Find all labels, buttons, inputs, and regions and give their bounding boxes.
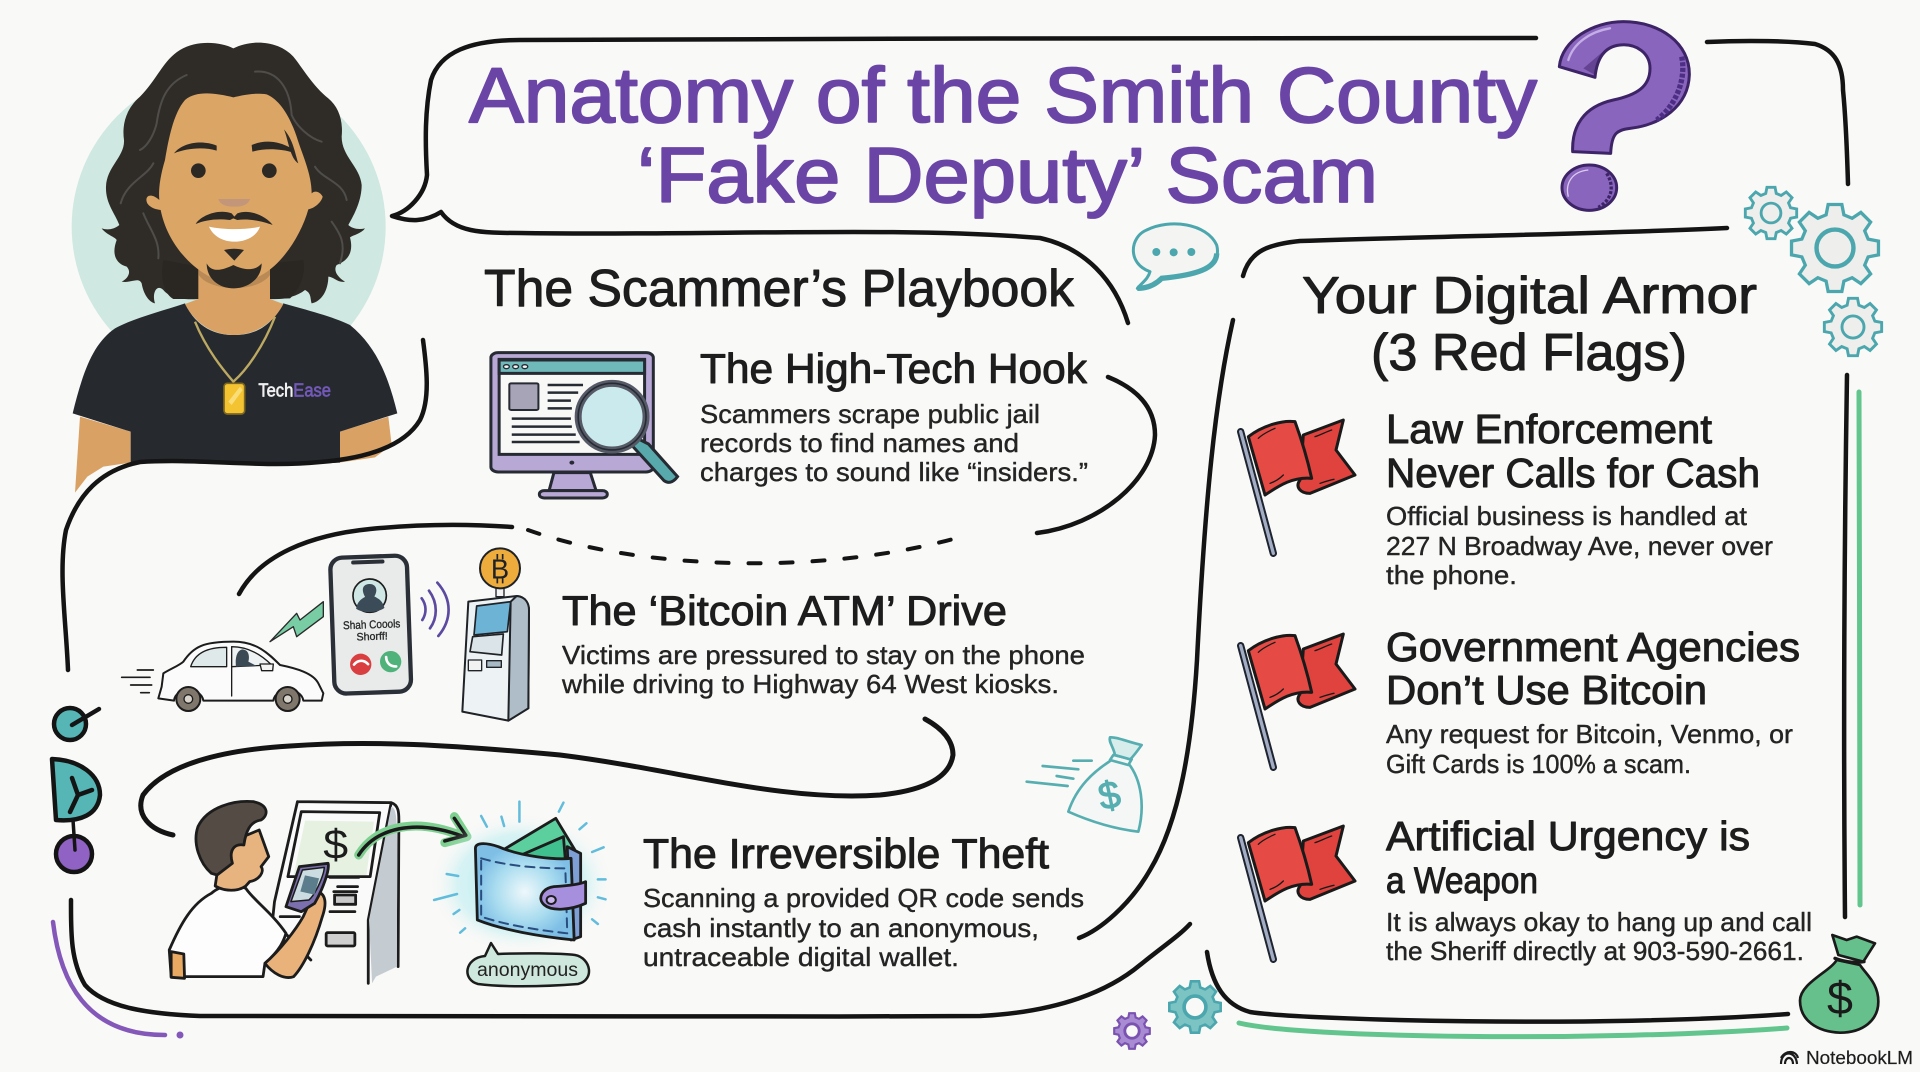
bitcoin ATM — [462, 548, 529, 721]
item 1 heading: Law Enforcement — [1386, 406, 1713, 452]
icon: green money bag — [1800, 935, 1878, 1033]
person — [169, 886, 286, 977]
facial features — [174, 142, 293, 288]
icon: flying money bag — [1027, 737, 1142, 832]
icon: gears bottom — [1114, 981, 1221, 1049]
panel outline: right — [1207, 375, 1847, 1022]
panel: irreversible theft — [169, 801, 1084, 986]
heading: The High-Tech Hook — [700, 345, 1088, 392]
item 3 heading — [1386, 813, 1750, 901]
text block: untraceable digital wallet. — [643, 942, 959, 972]
title — [469, 51, 1537, 219]
bitcoin ATM: B — [491, 553, 509, 584]
phone: Shorff! — [356, 630, 388, 643]
item 2 text: Gift Cards is 100% a scam. — [1386, 749, 1691, 779]
wallet — [475, 844, 574, 940]
item 1 text: the phone. — [1386, 560, 1517, 590]
icon: car, phone and ATM — [122, 548, 529, 721]
flag 2 — [1241, 634, 1355, 767]
item 3 text: It is always okay to hang up and call — [1386, 907, 1812, 937]
item 3 heading: Artificial Urgency is — [1386, 813, 1750, 859]
heading: The ‘Bitcoin ATM’ Drive — [562, 587, 1007, 634]
text block: Victims are pressured to stay on the phone — [562, 640, 1085, 670]
face — [146, 93, 323, 281]
arms — [75, 417, 392, 493]
avatar: TechEase presenter — [72, 43, 397, 493]
text block: Scanning a provided QR code sends — [643, 883, 1084, 913]
footer: NotebookLM logo: NotebookLM — [1806, 1048, 1913, 1068]
left panel outline — [63, 320, 1233, 1017]
icon: flying money bag: $ — [1095, 773, 1124, 819]
panel: bitcoin ATM drive — [122, 548, 1085, 721]
item 1 text — [1386, 501, 1773, 590]
illustration: person scanning QR at ATM: $ — [323, 820, 348, 868]
text block — [643, 883, 1084, 972]
item 2 text — [1386, 719, 1793, 779]
accent strokes — [53, 922, 183, 1038]
ATM — [273, 802, 399, 983]
sparkle lines — [434, 802, 606, 933]
shirt — [73, 303, 397, 464]
item 3 text — [1386, 907, 1812, 966]
phone — [330, 555, 411, 694]
icon: gear cluster — [1745, 187, 1882, 356]
icon: chat bubble — [1133, 224, 1217, 288]
panel: digital armor — [1241, 267, 1812, 966]
heading: The Irreversible Theft — [643, 830, 1049, 877]
item 1 heading: Never Calls for Cash — [1386, 450, 1760, 496]
green accent lines — [1239, 392, 1860, 1037]
heading: Your Digital Armor — [1302, 267, 1757, 325]
item 2 text: Any request for Bitcoin, Venmo, or — [1386, 719, 1793, 749]
title: ‘Fake Deputy’ Scam — [637, 131, 1378, 219]
tag: anonymous — [467, 943, 589, 986]
necklace and tag — [195, 317, 275, 382]
arrow — [359, 826, 462, 855]
icon: clock fragments — [52, 708, 100, 872]
text block: cash instantly to an anonymous, — [643, 913, 1039, 943]
heading: playbook: The Scammer’s Playbook — [484, 260, 1075, 318]
item 3 heading: a Weapon — [1386, 860, 1538, 901]
lightning — [270, 602, 323, 642]
item 3 text: the Sheriff directly at 903-590-2661. — [1386, 936, 1804, 966]
item 1 text: 227 N Broadway Ave, never over — [1386, 531, 1773, 561]
text block: while driving to Highway 64 West kiosks. — [561, 669, 1059, 699]
heading: (3 Red Flags) — [1371, 324, 1687, 382]
shirt logo: TechEase — [258, 380, 331, 401]
item 1 heading — [1386, 406, 1760, 496]
item 1 text: Official business is handled at — [1386, 501, 1748, 531]
icon: monitor with magnifier — [491, 353, 678, 498]
speech bubble outline around title — [392, 37, 1848, 323]
flag 3 — [1241, 826, 1355, 959]
text block: charges to sound like “insiders.” — [700, 457, 1088, 487]
money — [495, 818, 575, 860]
item 2 heading: Government Agencies — [1386, 624, 1800, 670]
item 2 heading — [1386, 624, 1800, 713]
text block — [561, 640, 1085, 699]
glow — [429, 813, 613, 953]
neck — [185, 263, 283, 335]
text block: records to find names and — [700, 428, 1019, 458]
item 2 heading: Don’t Use Bitcoin — [1386, 667, 1707, 713]
icon: question mark — [1559, 22, 1689, 210]
phone: Shah Coools — [343, 618, 401, 632]
text block: Scammers scrape public jail — [700, 399, 1040, 429]
heading — [1302, 267, 1757, 382]
illustration: person scanning QR at ATM — [169, 801, 613, 983]
tag: anonymous: anonymous — [477, 960, 578, 981]
flag 1 — [1241, 420, 1355, 553]
car — [122, 642, 323, 711]
icon: green money bag: $ — [1827, 972, 1853, 1024]
text block — [700, 399, 1088, 487]
hair — [102, 43, 365, 303]
signal waves — [422, 583, 449, 636]
panel: high-tech hook — [491, 345, 1088, 498]
title: Anatomy of the Smith County — [469, 51, 1537, 139]
